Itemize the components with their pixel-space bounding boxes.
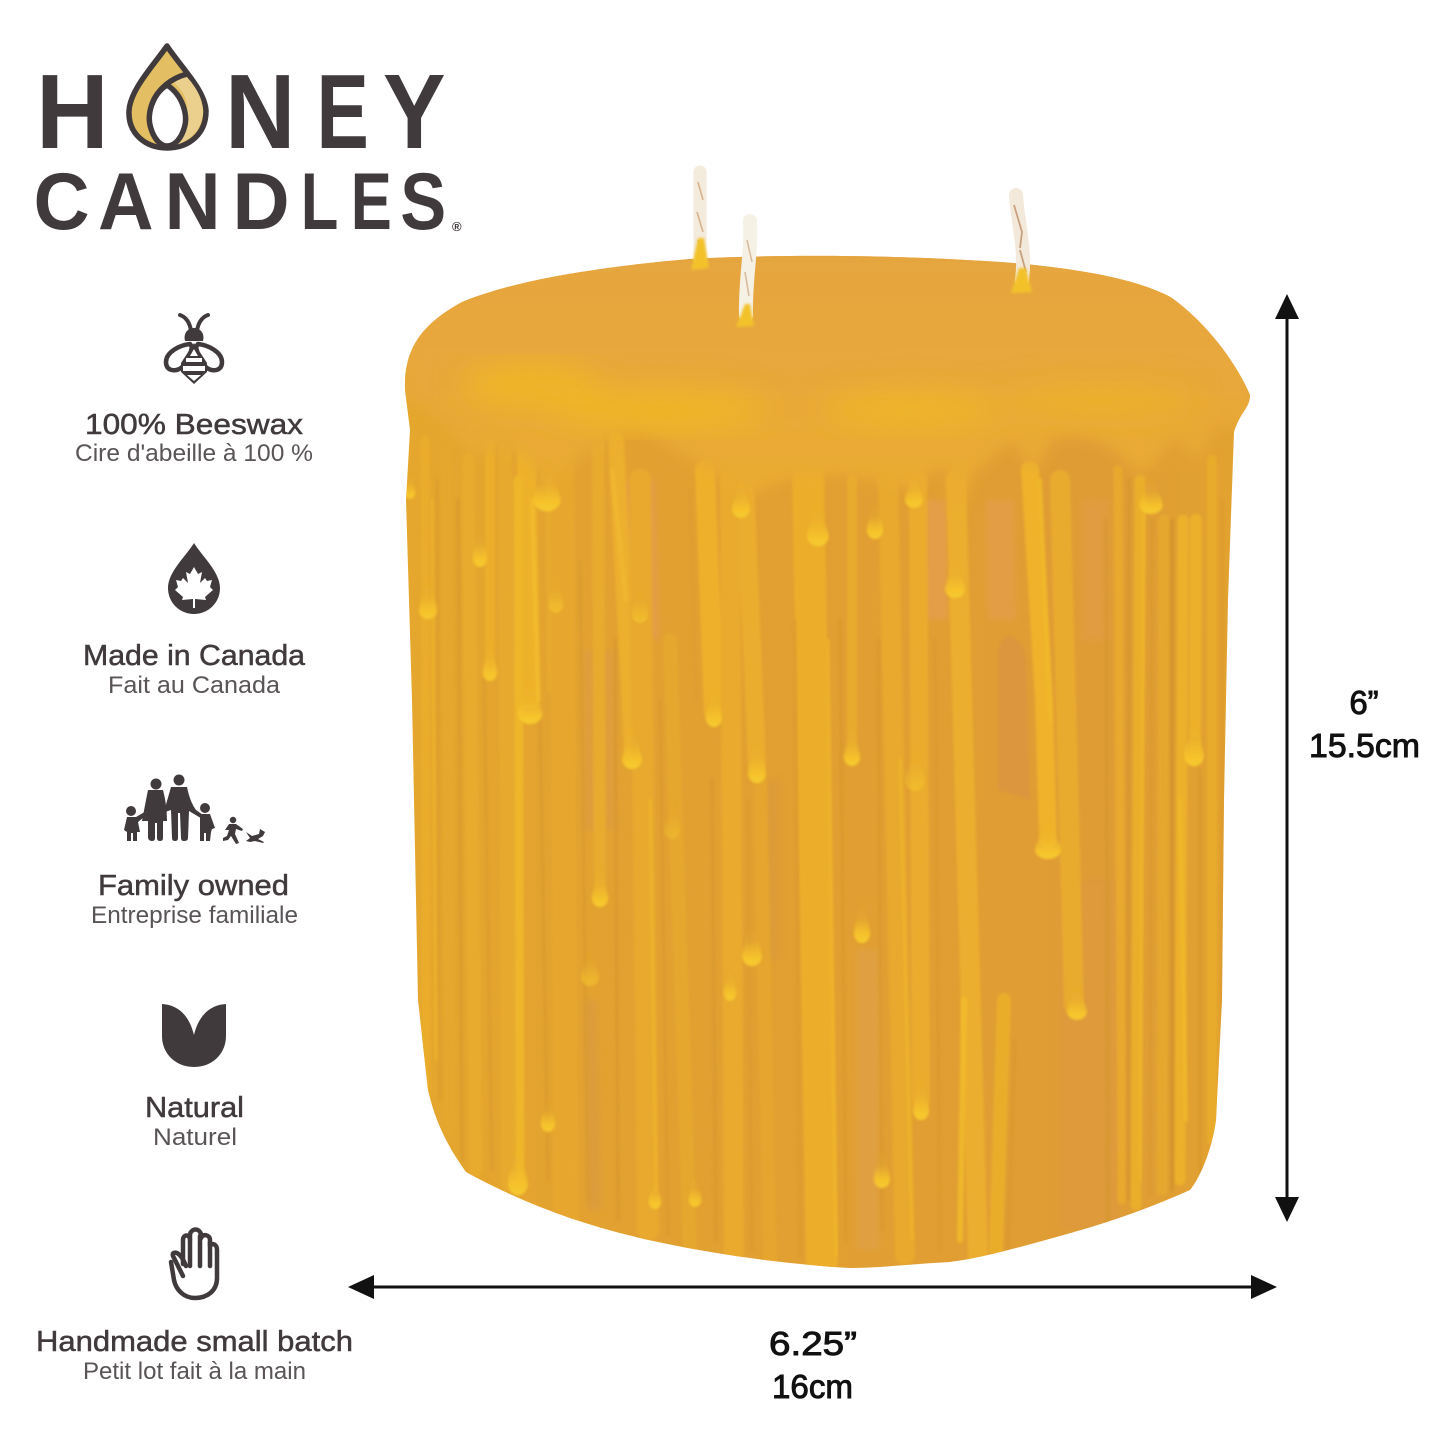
wordmark: CANDLES: E (351, 157, 392, 247)
label: Natural (145, 1092, 244, 1124)
icon: leaf tulip (162, 1004, 226, 1067)
wordmark: HONEY: N (225, 52, 295, 171)
logo: Honey Candles (34, 46, 462, 247)
wordmark: CANDLES: D (232, 155, 290, 246)
top wax surface with soft scalloped edge (404, 256, 1250, 488)
label: Family owned (98, 870, 289, 902)
icon: drop with maple leaf (168, 543, 220, 614)
sublabel: Entreprise familiale (91, 902, 298, 929)
icon: family with dog (124, 774, 265, 844)
height label: 6” (1349, 684, 1379, 721)
feature: Family owned (91, 774, 298, 929)
feature: Handmade small batch (36, 1230, 353, 1385)
arrow: width dimension (348, 1275, 1277, 1299)
wordmark: CANDLES: N (164, 156, 221, 246)
icon: flame drop (129, 46, 206, 148)
sublabel: Petit lot fait à la main (83, 1358, 306, 1385)
wordmark: HONEY: H (36, 52, 109, 171)
candle body (400, 250, 1260, 1280)
highlights and shadow lines (432, 470, 1222, 1255)
wordmark: CANDLES: L (301, 157, 338, 247)
label: 100% Beeswax (85, 409, 304, 441)
sublabel: Cire d'abeille à 100 % (75, 440, 313, 467)
wordmark: CANDLES: C (34, 156, 90, 246)
sublabel: Fait au Canada (108, 672, 281, 699)
arrow: height dimension (1275, 294, 1299, 1222)
candle photo illustration (400, 172, 1260, 1280)
label: Made in Canada (83, 640, 306, 672)
wordmark: CANDLES: S (400, 156, 446, 246)
wicks (691, 172, 1032, 327)
wordmark: HONEY (36, 52, 446, 171)
width label: 6.25” (769, 1325, 857, 1362)
wordmark: HONEY: Y (383, 53, 446, 171)
label: Handmade small batch (36, 1326, 353, 1358)
sublabel: Naturel (153, 1124, 237, 1151)
wordmark: CANDLES: A (98, 155, 154, 246)
yellow glow on upper edge (460, 361, 1200, 432)
wordmark: CANDLES: ® (452, 219, 462, 234)
height label (1309, 684, 1420, 764)
recessed orange areas (590, 480, 1150, 1250)
feature: Made in Canada (83, 543, 306, 699)
wordmark: CANDLES (34, 155, 462, 247)
wax drip columns (425, 430, 1212, 1260)
icon: hand (171, 1230, 217, 1298)
drip tips (405, 462, 1204, 1209)
width label (769, 1325, 857, 1405)
arch gap (998, 636, 1030, 800)
feature: 100% Beeswax (75, 315, 313, 467)
feature: Natural (145, 1004, 244, 1151)
wordmark: HONEY: E (316, 53, 369, 171)
height label: 15.5cm (1309, 727, 1420, 764)
icon: bee (166, 315, 222, 384)
width label: 16cm (772, 1368, 853, 1405)
